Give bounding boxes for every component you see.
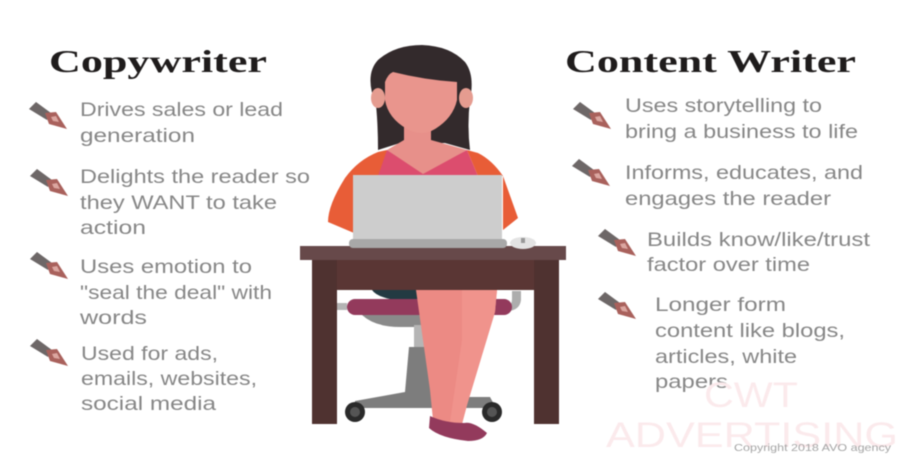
heading: Copywriter: Copywriter (49, 43, 267, 79)
item: uses emotion (30, 252, 272, 329)
item: uses emotion: Uses emotion to (80, 256, 252, 278)
item: informs: Informs, educates, and (625, 162, 863, 184)
item: longer form (598, 292, 845, 393)
hair (370, 45, 472, 150)
item: informs (572, 159, 863, 210)
face (385, 72, 457, 133)
item: longer form: content like blogs, (655, 320, 845, 342)
item: used for ads (30, 339, 257, 415)
top (372, 150, 478, 176)
ears (371, 88, 473, 108)
shoe (429, 416, 487, 441)
item: delights the reader: action (80, 217, 146, 239)
item: storytelling (573, 95, 858, 143)
item: used for ads: Used for ads, (81, 343, 218, 365)
item: used for ads: social media (81, 393, 216, 415)
item: know like trust: factor over time (647, 254, 810, 276)
illustration: woman at desk (300, 45, 566, 441)
item: drives sales: generation (80, 125, 195, 147)
panel: content writer list (572, 95, 871, 393)
heading: Content Writer: Content Writer (565, 43, 856, 79)
item: storytelling: Uses storytelling to (625, 95, 822, 117)
item: longer form: articles, white (655, 346, 797, 368)
watermark: CWT Advertising (606, 376, 898, 455)
item: longer form: Longer form (655, 294, 786, 316)
neck (387, 125, 467, 176)
sleeves (328, 150, 518, 233)
copyright note: Copyright 2018 AVO agency (734, 442, 892, 454)
legs (416, 290, 497, 424)
laptop (349, 175, 507, 248)
mouse (510, 237, 536, 249)
panel: copywriter list (29, 99, 310, 415)
item: delights the reader: Delights the reader so (80, 166, 310, 188)
item: drives sales (29, 99, 283, 147)
item: longer form: papers (655, 371, 728, 393)
item: storytelling: bring a business to life (625, 121, 858, 143)
item: drives sales: Drives sales or lead (80, 99, 283, 121)
watermark: CWT Advertising: ADVERTISING (606, 416, 898, 455)
chair (337, 290, 521, 422)
desk (300, 246, 566, 424)
item: informs: engages the reader (625, 188, 832, 210)
item: used for ads: emails, websites, (81, 368, 257, 390)
item: know like trust (598, 229, 871, 276)
item: know like trust: Builds know/like/trust (647, 229, 871, 251)
item: uses emotion: words (79, 307, 147, 329)
item: delights the reader (30, 166, 310, 239)
item: delights the reader: they WANT to take (80, 192, 277, 214)
watermark: CWT Advertising: CWT (704, 376, 798, 415)
item: uses emotion: "seal the deal" with (80, 282, 272, 304)
